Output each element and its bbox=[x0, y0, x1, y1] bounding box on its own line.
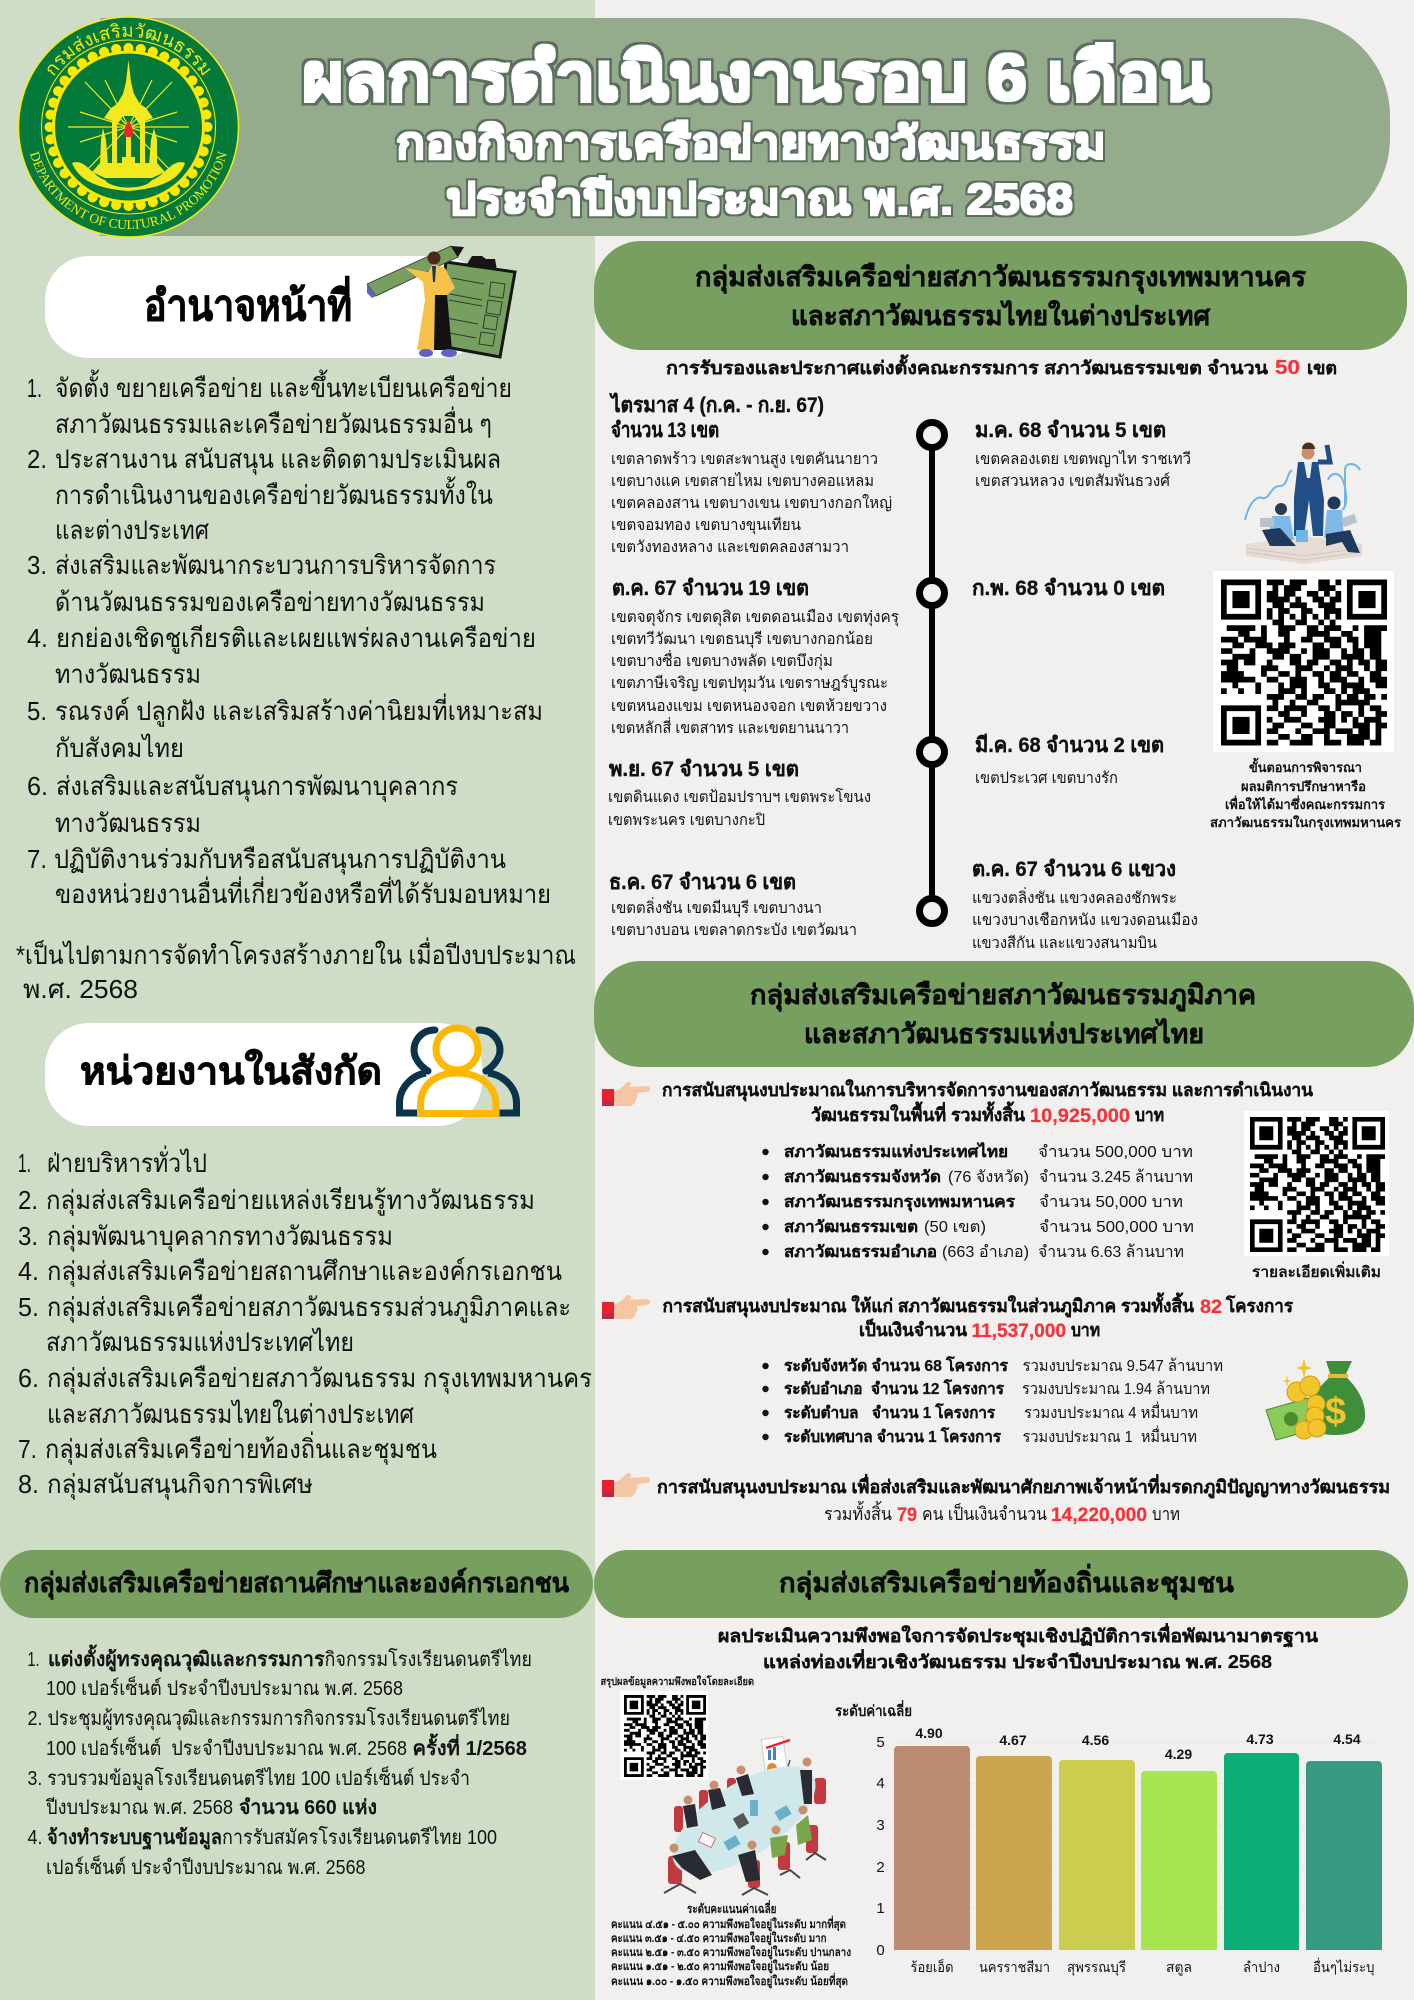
survey heading: ผลประเมินความพึงพอใจการจัดประชุมเชิงปฏิบัติการเพื่อพัฒนามาตรฐาน bbox=[718, 1623, 1319, 1648]
timeline entry: December 67 bbox=[609, 871, 857, 939]
QR code: more details bbox=[1244, 1111, 1390, 1256]
timeline entry: January 68 bbox=[975, 419, 1191, 490]
province labels: ลำปาง bbox=[1243, 1959, 1280, 1975]
list: education group activities: จ้างทำระบบฐานข้อมูล bbox=[47, 1826, 222, 1851]
bars bbox=[894, 1746, 1382, 1950]
list: education group activities: 4. bbox=[28, 1827, 42, 1849]
list: powers and duties bbox=[27, 369, 551, 909]
heading banner: local communities bbox=[594, 1550, 1408, 1618]
list: affiliated units: 8. bbox=[18, 1469, 39, 1499]
list: regional budget by level: ระดับจังหวัด จำนวน 68 โครงการ bbox=[784, 1355, 1008, 1375]
list: regional budget by level: รวมงบประมาณ 1 หมื่นบาท bbox=[1022, 1425, 1197, 1446]
list: powers and duties: ของหน่วยงานอื่นที่เกี่ยวข้องหรือที่ได้รับมอบหมาย bbox=[55, 876, 551, 909]
bar value labels: 4.56 bbox=[1082, 1732, 1109, 1748]
note about internal structure: *เป็นไปตามการจัดทำโครงสร้างภายใน เมื่อปีงบประมาณ bbox=[16, 937, 576, 970]
list: regional budget by level: ระดับอำเภอ จำนวน 12 โครงการ bbox=[784, 1378, 1004, 1398]
timeline entry: quarter 4: เขตลาดพร้าว เขตสะพานสูง เขตคันนายาว bbox=[611, 451, 878, 469]
list: powers and duties: ด้านวัฒนธรรมของเครือข่ายทางวัฒนธรรม bbox=[55, 587, 485, 617]
section 3: heritage officers budget: รวมทั้งสิ้น bbox=[824, 1501, 892, 1524]
timeline entry: November 67: เขตพระนคร เขตบางกะปิ bbox=[608, 812, 765, 829]
legend: average score levels bbox=[611, 1900, 851, 1989]
timeline entry: December 67: เขตบางบอน เขตลาดกระบัง เขตวัฒนา bbox=[611, 922, 857, 939]
QR code: satisfaction summary bbox=[620, 1691, 709, 1780]
header banner bbox=[100, 18, 1390, 236]
timeline entry: October 67: เขตภาษีเจริญ เขตปทุมวัน เขตราษฎร์บูรณะ bbox=[611, 674, 888, 693]
logo: department seal bbox=[18, 16, 240, 238]
timeline entry: October 67: ต.ค. 67 จำนวน 19 เขต bbox=[612, 577, 809, 600]
panel: powers and duties heading bbox=[45, 246, 515, 358]
legend: average score levels: คะแนน ๔.๕๑ - ๕.๐๐ ความพึงพอใจอยู่ในระดับ มากที่สุด bbox=[611, 1915, 846, 1932]
heading banner: regional councils: และสภาวัฒนธรรมแห่งประเทศไทย bbox=[804, 1018, 1204, 1049]
province labels: สุพรรณบุรี bbox=[1067, 1959, 1126, 1976]
heading banner: Bangkok cultural councils: กลุ่มส่งเสริมเครือข่ายสภาวัฒนธรรมกรุงเทพมหานคร bbox=[695, 262, 1306, 294]
timeline entry: quarter 4: เขตจอมทอง เขตบางขุนเทียน bbox=[611, 517, 801, 535]
icon: people with laptops on paper stack bbox=[1245, 443, 1362, 564]
section 2 heading: regional budget bbox=[662, 1292, 1293, 1342]
list: powers and duties: 5. bbox=[27, 696, 47, 726]
section 2 heading: regional budget: โครงการ bbox=[1225, 1295, 1293, 1316]
timeline entry: quarter 4: เขตบางแค เขตสายไหม เขตบางคอแหลม bbox=[611, 472, 874, 490]
timeline entry: November 67 bbox=[608, 758, 871, 829]
list: affiliated units: กลุ่มส่งเสริมเครือข่ายแหล่งเรียนรู้ทางวัฒนธรรม bbox=[46, 1185, 535, 1216]
list: budget by council level: (76 จังหวัด) bbox=[948, 1169, 1029, 1186]
list: regional budget by level: รวมงบประมาณ 4 หมื่นบาท bbox=[1024, 1401, 1198, 1422]
list: budget by council level: จำนวน 3.245 ล้านบาท bbox=[1039, 1168, 1193, 1186]
timeline entry: quarter 4: จำนวน 13 เขต bbox=[611, 419, 719, 442]
panel: affiliated units heading bbox=[45, 1023, 516, 1126]
timeline entry: October 67 sub-districts: แขวงบางเชือกหนัง แขวงดอนเมือง bbox=[972, 911, 1198, 929]
province labels: ร้อยเอ็ด bbox=[910, 1958, 954, 1975]
list: budget by council level: (663 อำเภอ) bbox=[942, 1244, 1029, 1261]
list: education group activities: กิจกรรมโรงเรียนดนตรีไทย bbox=[324, 1648, 532, 1671]
icon: pointing hand 1 bbox=[602, 1082, 650, 1106]
list: education group activities bbox=[28, 1644, 532, 1879]
list: budget by council level: จำนวน 50,000 บาท bbox=[1039, 1194, 1183, 1211]
list: affiliated units bbox=[18, 1145, 592, 1500]
list: affiliated units: 7. bbox=[18, 1434, 37, 1464]
list: affiliated units: 3. bbox=[18, 1221, 38, 1251]
summary: 50 district councils: การรับรองและประกาศแต่งตั้งคณะกรรมการ สภาวัฒนธรรมเขต จำนวน bbox=[666, 354, 1269, 378]
list: powers and duties: ทางวัฒนธรรม bbox=[55, 659, 201, 689]
chart title: ระดับค่าเฉลี่ย bbox=[835, 1700, 912, 1720]
list: affiliated units: 6. bbox=[18, 1363, 39, 1393]
list: powers and duties: 3. bbox=[27, 550, 47, 580]
y axis labels bbox=[876, 1734, 885, 1959]
left background panel bbox=[0, 0, 595, 2000]
y axis labels: 4 bbox=[876, 1775, 885, 1792]
heading banner: education and private organisations bbox=[0, 1550, 593, 1618]
timeline entry: March 68: มี.ค. 68 จำนวน 2 เขต bbox=[975, 733, 1164, 757]
list: affiliated units: 1. bbox=[18, 1148, 31, 1178]
timeline entry: January 68: เขตสวนหลวง เขตสัมพันธวงศ์ bbox=[975, 472, 1170, 490]
note about internal structure: พ.ศ. 2568 bbox=[23, 974, 138, 1004]
icon: pointing hand 2 bbox=[602, 1295, 650, 1319]
heading banner: Bangkok cultural councils: และสภาวัฒนธรรมไทยในต่างประเทศ bbox=[791, 300, 1211, 331]
section 2 heading: regional budget: 11,537,000 bbox=[972, 1321, 1066, 1342]
list: affiliated units: 5. bbox=[18, 1292, 39, 1322]
caption: QR code procedure: ขั้นตอนการพิจารณา bbox=[1249, 757, 1362, 775]
list: education group activities: ปีงบประมาณ พ.ศ. 2568 bbox=[46, 1797, 233, 1819]
list: budget by council level bbox=[762, 1142, 1194, 1261]
icon: pointing hand 3 bbox=[602, 1473, 650, 1497]
survey heading: แหล่งท่องเที่ยวเชิงวัฒนธรรม ประจำปีงบประมาณ พ.ศ. 2568 bbox=[763, 1649, 1272, 1672]
list: powers and duties: รณรงค์ ปลูกฝัง และเสริมสร้างค่านิยมที่เหมาะสม bbox=[55, 693, 543, 727]
list: education group activities: 3. รวบรวมข้อมูลโรงเรียนดนตรีไทย 100 เปอร์เซ็นต์ ประจำ bbox=[28, 1765, 470, 1791]
list: education group activities: แต่งตั้งผู้ทรงคุณวุฒิและกรรมการ bbox=[48, 1644, 325, 1673]
list: affiliated units: สภาวัฒนธรรมแห่งประเทศไทย bbox=[46, 1327, 354, 1357]
y axis labels: 5 bbox=[876, 1734, 885, 1751]
list: budget by council level: สภาวัฒนธรรมอำเภอ bbox=[784, 1243, 937, 1261]
bar value labels: 4.73 bbox=[1246, 1731, 1274, 1747]
list: education group activities: 1. bbox=[28, 1649, 40, 1671]
heading: affiliated units: หน่วยงานในสังกัด bbox=[80, 1049, 382, 1093]
section 3: heritage officers budget: การสนับสนุนงบประมาณ เพื่อส่งเสริมและพัฒนาศักยภาพเจ้าหน้าที่มรดกภูมิปัญญาทางวัฒนธรรม bbox=[657, 1474, 1390, 1499]
timeline entry: October 67: เขตทวีวัฒนา เขตธนบุรี เขตบางกอกน้อย bbox=[611, 631, 873, 649]
seal text: English name: DEPARTMENT OF CULTURAL PROMOTION bbox=[30, 151, 227, 229]
list: powers and duties: ส่งเสริมและสนับสนุนการพัฒนาบุคลากร bbox=[56, 771, 458, 802]
icon: meeting around table bbox=[656, 1737, 832, 1895]
icon: person with pencil and clipboard bbox=[367, 246, 515, 357]
section 2 heading: regional budget: เป็นเงินจำนวน bbox=[859, 1318, 968, 1340]
y axis labels: 0 bbox=[876, 1942, 885, 1959]
heading: duties: อำนาจหน้าที่ bbox=[144, 276, 352, 329]
list: budget by council level: สภาวัฒนธรรมเขต bbox=[784, 1218, 918, 1236]
list: affiliated units: และสภาวัฒนธรรมไทยในต่างประเทศ bbox=[47, 1399, 414, 1429]
section 3: heritage officers budget: บาท bbox=[1152, 1504, 1180, 1524]
seal text: Thai name: กรมส่งเสริมวัฒนธรรม bbox=[48, 22, 211, 76]
timeline entry: February 68: ก.พ. 68 จำนวน 0 เขต bbox=[972, 577, 1165, 600]
heading banner: local communities: กลุ่มส่งเสริมเครือข่ายท้องถิ่นและชุมชน bbox=[779, 1563, 1235, 1600]
legend: average score levels: คะแนน ๓.๕๑ - ๔.๕๐ ความพึงพอใจอยู่ในระดับ มาก bbox=[611, 1931, 827, 1946]
section 2 heading: regional budget: บาท bbox=[1071, 1320, 1100, 1340]
bar value labels bbox=[915, 1725, 1361, 1762]
bar value labels: 4.29 bbox=[1165, 1746, 1192, 1762]
bar chart: average satisfaction by province bbox=[835, 1700, 1382, 1976]
timeline entry: October 67: เขตหลักสี่ เขตสาทร และเขตยานนาวา bbox=[611, 717, 849, 737]
section 3: heritage officers budget: 79 bbox=[897, 1505, 917, 1526]
timeline bbox=[920, 422, 944, 924]
note about internal structure bbox=[16, 937, 576, 1004]
bar value labels: 4.54 bbox=[1333, 1731, 1361, 1747]
list: affiliated units: 2. bbox=[18, 1185, 38, 1215]
list: education group activities: 2. ประชุมผู้ทรงคุณวุฒิและกรรมการกิจกรรมโรงเรียนดนตรีไทย bbox=[28, 1707, 510, 1731]
timeline entry: November 67: พ.ย. 67 จำนวน 5 เขต bbox=[609, 758, 799, 781]
list: powers and duties: 2. bbox=[27, 444, 47, 474]
caption: QR code procedure: เพื่อให้ได้มาซึ่งคณะกรรมการ bbox=[1225, 795, 1385, 812]
caption: QR code procedure bbox=[1210, 757, 1401, 831]
list: education group activities: จำนวน 660 แห่ง bbox=[239, 1797, 377, 1819]
section 1 heading: budget total bbox=[662, 1079, 1314, 1127]
list: affiliated units: กลุ่มส่งเสริมเครือข่ายสภาวัฒนธรรมส่วนภูมิภาคและ bbox=[47, 1292, 571, 1323]
province labels: อื่นๆไม่ระบุ bbox=[1313, 1958, 1374, 1976]
list: budget by council level: จำนวน 500,000 บาท bbox=[1038, 1144, 1193, 1161]
list: powers and duties: 7. bbox=[27, 844, 47, 874]
icon: money bag and coins bbox=[1266, 1358, 1365, 1440]
timeline entry: December 67: เขตตลิ่งชัน เขตมีนบุรี เขตบางนา bbox=[611, 897, 822, 918]
list: regional budget by level: รวมงบประมาณ 9.547 ล้านบาท bbox=[1022, 1357, 1223, 1375]
caption: QR code procedure: ผลมติการปรึกษาหารือ bbox=[1241, 779, 1366, 794]
caption: QR code procedure: สภาวัฒนธรรมในกรุงเทพมหานคร bbox=[1210, 814, 1401, 831]
section 3: heritage officers budget: คน เป็นเงินจำนวน bbox=[922, 1502, 1047, 1524]
list: powers and duties: และต่างประเทศ bbox=[55, 515, 209, 545]
timeline entry: March 68: เขตประเวศ เขตบางรัก bbox=[975, 770, 1118, 787]
legend: average score levels: ระดับคะแนนค่าเฉลี่ย bbox=[687, 1900, 776, 1916]
section 1 heading: budget total: วัฒนธรรมในพื้นที่ รวมทั้งสิ้น bbox=[811, 1101, 1026, 1125]
list: education group activities: เปอร์เซ็นต์ ประจำปีงบประมาณ พ.ศ. 2568 bbox=[46, 1854, 366, 1879]
list: budget by council level: สภาวัฒนธรรมแห่งประเทศไทย bbox=[784, 1142, 1008, 1161]
list: budget by council level: จำนวน 500,000 บาท bbox=[1039, 1219, 1194, 1236]
list: regional budget by level: ระดับตำบล bbox=[784, 1404, 858, 1422]
subtitle line 2: ประจำปีงบประมาณ พ.ศ. 2568 bbox=[446, 175, 1073, 224]
timeline entry: quarter 4: ไตรมาส 4 (ก.ค. - ก.ย. 67) bbox=[609, 392, 824, 417]
list: powers and duties: ประสานงาน สนับสนุน และติดตามประเมินผล bbox=[55, 444, 501, 475]
timeline entry: October 67: เขตจตุจักร เขตดุสิต เขตดอนเมือง เขตทุ่งครุ bbox=[611, 608, 899, 627]
timeline entry: October 67 sub-districts: แขวงตลิ่งชัน แขวงคลองชักพระ bbox=[972, 887, 1177, 907]
list: powers and duties: ปฏิบัติงานร่วมกับหรือสนับสนุนการปฏิบัติงาน bbox=[54, 844, 506, 875]
list: budget by council level: (50 เขต) bbox=[924, 1219, 986, 1236]
QR code: consideration procedure bbox=[1213, 571, 1394, 752]
heading banner: Bangkok cultural councils bbox=[594, 241, 1407, 350]
timeline entry: October 67 sub-districts bbox=[972, 858, 1198, 952]
list: powers and duties: 4. bbox=[27, 623, 48, 653]
list: powers and duties: การดำเนินงานของเครือข่ายวัฒนธรรมทั้งใน bbox=[55, 476, 493, 510]
y axis labels: 3 bbox=[876, 1817, 885, 1834]
y axis labels: 1 bbox=[876, 1900, 885, 1917]
list: affiliated units: กลุ่มสนับสนุนกิจการพิเศษ bbox=[47, 1469, 313, 1500]
list: powers and duties: สภาวัฒนธรรมและเครือข่ายวัฒนธรรมอื่น ๆ bbox=[55, 406, 492, 439]
legend: average score levels: คะแนน ๑.๕๑ - ๒.๕๐ ความพึงพอใจอยู่ในระดับ น้อย bbox=[611, 1959, 829, 1974]
list: powers and duties: ยกย่องเชิดชูเกียรติและเผยแพร่ผลงานเครือข่าย bbox=[56, 623, 536, 654]
timeline entry: January 68: ม.ค. 68 จำนวน 5 เขต bbox=[975, 419, 1166, 442]
list: regional budget by level: รวมงบประมาณ 1.94 ล้านบาท bbox=[1022, 1380, 1210, 1398]
summary: 50 district councils bbox=[666, 354, 1337, 379]
section 2 heading: regional budget: 82 bbox=[1200, 1297, 1222, 1318]
list: regional budget by level bbox=[762, 1355, 1223, 1446]
list: affiliated units: กลุ่มส่งเสริมเครือข่ายสถานศึกษาและองค์กรเอกชน bbox=[47, 1256, 562, 1287]
summary: 50 district councils: เขต bbox=[1307, 358, 1337, 378]
list: budget by council level: สภาวัฒนธรรมกรุงเทพมหานคร bbox=[784, 1193, 1015, 1212]
heading banner: regional councils: กลุ่มส่งเสริมเครือข่ายสภาวัฒนธรรมภูมิภาค bbox=[750, 980, 1256, 1012]
timeline entry: October 67: เขตบางซื่อ เขตบางพลัด เขตบึงกุ่ม bbox=[611, 650, 833, 671]
right background panel bbox=[595, 0, 1414, 2000]
caption: more details: รายละเอียดเพิ่มเติม bbox=[1252, 1261, 1381, 1281]
section 3: heritage officers budget bbox=[657, 1474, 1390, 1526]
section 1 heading: budget total: 10,925,000 bbox=[1030, 1106, 1130, 1127]
heading banner: regional councils bbox=[594, 961, 1414, 1067]
list: affiliated units: ฝ่ายบริหารทั่วไป bbox=[47, 1145, 207, 1178]
list: budget by council level: สภาวัฒนธรรมจังหวัด bbox=[784, 1168, 941, 1186]
timeline entry: December 67: ธ.ค. 67 จำนวน 6 เขต bbox=[609, 871, 796, 894]
timeline entry: October 67 bbox=[611, 577, 899, 737]
list: regional budget by level: จำนวน 1 โครงการ bbox=[872, 1402, 995, 1422]
subtitle line 1: กองกิจการเครือข่ายทางวัฒนธรรม bbox=[396, 119, 1106, 168]
list: education group activities: 100 เปอร์เซ็นต์ ประจำปีงบประมาณ พ.ศ. 2568 bbox=[46, 1675, 403, 1700]
section 1 heading: budget total: บาท bbox=[1135, 1105, 1164, 1125]
caption: satisfaction summary QR: สรุปผลข้อมูลความพึงพอใจโดยละเอียด bbox=[600, 1674, 754, 1689]
list: powers and duties: กับสังคมไทย bbox=[55, 733, 184, 763]
list: powers and duties: 6. bbox=[27, 771, 48, 801]
list: education group activities: ครั้งที่ 1/2568 bbox=[412, 1733, 527, 1760]
list: affiliated units: กลุ่มส่งเสริมเครือข่ายท้องถิ่นและชุมชน bbox=[45, 1431, 437, 1465]
timeline entry: March 68 bbox=[975, 733, 1164, 787]
survey heading bbox=[718, 1623, 1319, 1672]
timeline entry: quarter 4: เขตวังทองหลาง และเขตคลองสามวา bbox=[611, 539, 849, 556]
heading banner: education and private organisations: กลุ่มส่งเสริมเครือข่ายสถานศึกษาและองค์กรเอกชน bbox=[24, 1567, 569, 1600]
timeline entry: November 67: เขตดินแดง เขตป้อมปราบฯ เขตพระโขนง bbox=[608, 788, 871, 806]
list: affiliated units: กลุ่มส่งเสริมเครือข่ายสภาวัฒนธรรม กรุงเทพมหานคร bbox=[47, 1363, 592, 1394]
section 3: heritage officers budget: 14,220,000 bbox=[1051, 1505, 1147, 1526]
list: powers and duties: จัดตั้ง ขยายเครือข่าย และขึ้นทะเบียนเครือข่าย bbox=[55, 369, 512, 403]
list: powers and duties: 1. bbox=[27, 373, 42, 403]
province labels bbox=[910, 1958, 1374, 1976]
timeline entry: January 68: เขตคลองเตย เขตพญาไท ราชเทวี bbox=[975, 450, 1191, 468]
summary: 50 district councils: 50 bbox=[1275, 357, 1300, 379]
timeline entry: October 67 sub-districts: แขวงสีกัน และแขวงสนามบิน bbox=[972, 935, 1157, 952]
list: education group activities: 100 เปอร์เซ็นต์ ประจำปีงบประมาณ พ.ศ. 2568 bbox=[46, 1735, 407, 1760]
legend: average score levels: คะแนน ๒.๕๑ - ๓.๕๐ ความพึงพอใจอยู่ในระดับ ปานกลาง bbox=[611, 1945, 851, 1960]
icon: group of people bbox=[400, 1028, 516, 1114]
province labels: นครราชสีมา bbox=[979, 1959, 1050, 1975]
list: affiliated units: 4. bbox=[18, 1256, 39, 1286]
list: budget by council level: จำนวน 6.63 ล้านบาท bbox=[1038, 1243, 1184, 1261]
y axis labels: 2 bbox=[876, 1859, 885, 1876]
timeline entry: October 67 sub-districts: ต.ค. 67 จำนวน 6 แขวง bbox=[972, 858, 1176, 881]
bar value labels: 4.90 bbox=[915, 1725, 943, 1741]
list: education group activities: การรับสมัครโรงเรียนดนตรีไทย 100 bbox=[222, 1826, 497, 1849]
legend: average score levels: คะแนน ๑.๐๐ - ๑.๕๐ ความพึงพอใจอยู่ในระดับ น้อยที่สุด bbox=[611, 1972, 848, 1989]
bar value labels: 4.67 bbox=[999, 1732, 1027, 1748]
list: powers and duties: ทางวัฒนธรรม bbox=[55, 808, 201, 838]
section 2 heading: regional budget: การสนับสนุนงบประมาณ ให้แก่ สภาวัฒนธรรมในส่วนภูมิภาค รวมทั้งสิ้น bbox=[662, 1292, 1195, 1318]
province labels: สตูล bbox=[1166, 1959, 1192, 1976]
section 1 heading: budget total: การสนับสนุนงบประมาณในการบริหารจัดการงานของสภาวัฒนธรรม และการดำเนินงาน bbox=[662, 1079, 1314, 1102]
timeline entry: quarter 4 bbox=[609, 392, 892, 556]
icon: money bag and coins: $ bbox=[1325, 1391, 1346, 1433]
timeline entry: quarter 4: เขตคลองสาน เขตบางเขน เขตบางกอกใหญ่ bbox=[611, 494, 892, 512]
title: ผลการดำเนินงานรอบ 6 เดือน bbox=[302, 40, 1209, 114]
timeline entry: October 67: เขตหนองแขม เขตหนองจอก เขตห้วยขวาง bbox=[611, 698, 887, 715]
list: regional budget by level: ระดับเทศบาล จำนวน 1 โครงการ bbox=[784, 1426, 1001, 1446]
list: powers and duties: ส่งเสริมและพัฒนากระบวนการบริหารจัดการ bbox=[55, 550, 496, 580]
list: affiliated units: กลุ่มพัฒนาบุคลากรทางวัฒนธรรม bbox=[47, 1221, 393, 1252]
